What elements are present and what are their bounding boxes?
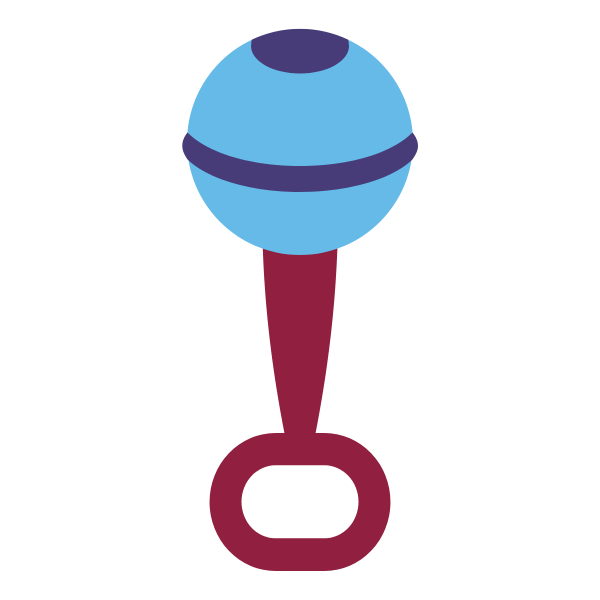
rattle handle ring [210, 433, 390, 571]
middle band [182, 132, 418, 192]
rattle ball [187, 29, 413, 255]
rattle handle stem [263, 245, 338, 436]
top cap [251, 29, 349, 73]
